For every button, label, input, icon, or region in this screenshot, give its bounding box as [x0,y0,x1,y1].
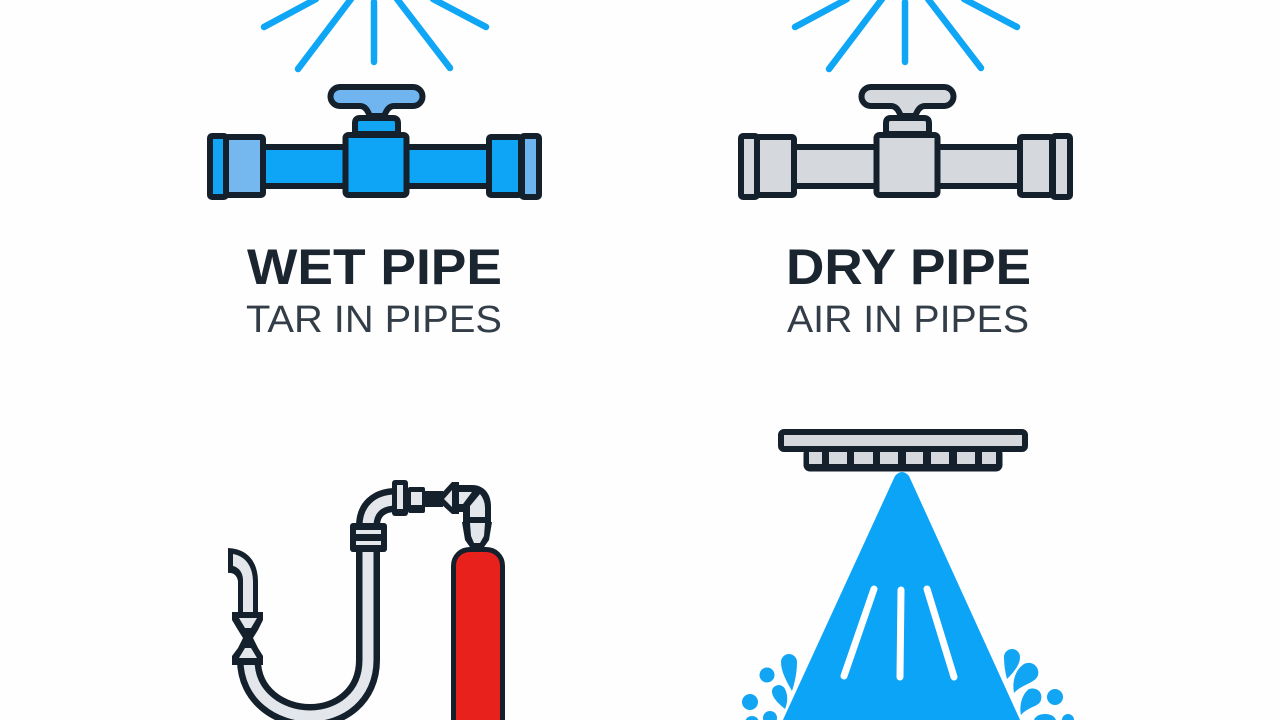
icon: cylinder valve assembly [392,480,492,550]
text: air in pipes: AIR IN PIPES [787,299,1029,341]
icon: left water droplets [742,654,797,720]
heading: dry pipe: DRY PIPE [786,239,1031,295]
icon: dry pipe valve [741,87,1070,197]
icon: right water droplets [1004,649,1074,720]
icon: water spray cone [782,472,1021,720]
panel: deluge sprinkler [742,432,1074,720]
icon: pipe collar [350,523,387,552]
icon: dry pipe water spray [795,0,1017,69]
icon: wet pipe valve [210,87,539,197]
icon: red gas cylinder [454,550,502,720]
panel: dry pipe [741,0,1070,341]
icon: bent nozzle [228,548,258,614]
icon: ceiling sprinkler bar [781,432,1025,469]
heading: wet pipe: WET PIPE [247,239,502,295]
icon: wet pipe water spray [264,0,486,69]
panel: gas cylinder system [228,480,502,720]
panel: wet pipe [210,0,539,341]
icon: spray streaks [844,589,954,677]
text: tar in pipes: TAR IN PIPES [246,299,502,341]
icon: hourglass valve [232,612,263,665]
icon: u-shaped pipe [249,500,396,716]
